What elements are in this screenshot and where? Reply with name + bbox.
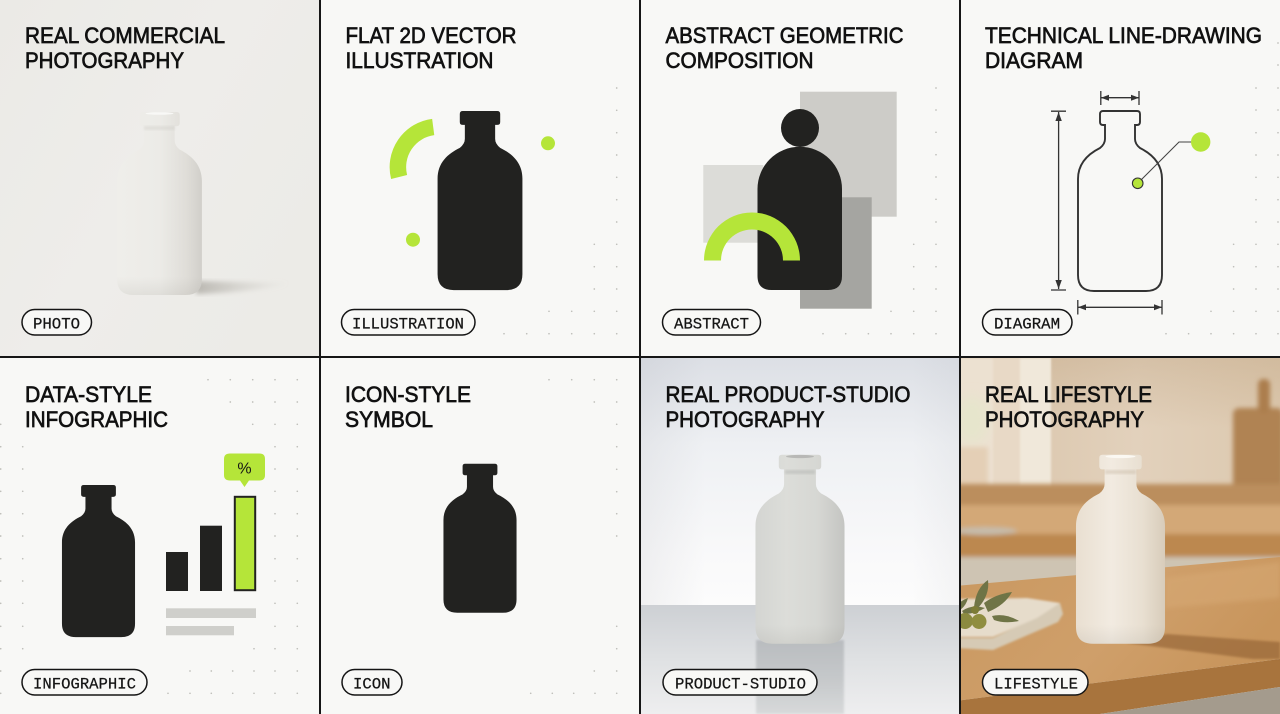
bottle cast shadow [196,281,290,294]
green arc [398,127,433,177]
floor at bottom right [1100,687,1280,714]
tag: lifestyle [982,670,1088,695]
pale grey square [703,165,763,243]
bottle outline [1078,111,1162,291]
bar chart [166,497,255,591]
photo of white bottle [117,112,202,295]
heading: ABSTRACT GEOMETRIC [666,23,904,48]
panel: icon-style symbol [342,380,617,695]
blurred pot [961,446,989,485]
panel: real lifestyle photography [950,358,1280,714]
heading: FLAT 2D VECTOR [346,23,516,48]
caption placeholder bars [166,608,256,635]
heading: DATA-STYLE [25,382,152,407]
tag: icon [342,670,402,695]
dimension: neck width [1101,91,1139,105]
table front edge [955,659,1280,714]
sun band on table [1190,564,1279,602]
tag: infographic: INFOGRAPHIC [33,675,136,693]
heading: SYMBOL [345,407,433,432]
panel: real commercial photography [0,0,319,356]
panel: abstract geometric composition [662,23,936,335]
heading: PHOTOGRAPHY [985,407,1144,432]
panel: data-style infographic [1,380,297,695]
window light [955,358,1051,492]
tag: abstract [662,310,760,335]
tag: infographic [22,670,147,695]
blurred cutting boards [1233,379,1280,500]
percent callout: % [237,460,252,478]
bottle cast shadow [1127,634,1280,659]
heading: ILLUSTRATION [346,48,494,73]
dimension: base width [1078,300,1162,314]
mid grey square [800,197,872,309]
tag: diagram: DIAGRAM [994,315,1060,333]
percent callout [224,454,265,487]
heading: PHOTOGRAPHY [666,407,825,432]
olive branch [955,580,1019,629]
tag: icon: ICON [353,675,390,693]
green dot right [541,136,555,150]
callout leader and markers [1132,132,1210,189]
black bottle silhouette [438,111,522,290]
kitchen wall [961,358,1280,488]
photo of grey bottle [755,455,845,644]
light grey square [800,92,897,217]
black circle [781,109,819,147]
blurred plant and pot [956,396,988,444]
tag: diagram [982,310,1072,335]
folded napkin [955,598,1063,650]
tag: abstract: ABSTRACT [674,315,749,333]
heading: TECHNICAL LINE-DRAWING [985,23,1262,48]
tag: photo: PHOTO [33,315,80,333]
heading: INFOGRAPHIC [25,407,168,432]
backdrop edge falloff [641,364,660,605]
green arch [704,212,800,260]
tag: lifestyle: LIFESTYLE [994,675,1078,693]
bottle reflection [756,640,844,714]
heading: REAL COMMERCIAL [25,23,225,48]
green dot left [406,233,420,247]
tag: product-studio: PRODUCT-STUDIO [675,675,806,693]
panel: real product-studio photography [641,358,960,714]
tag: illustration [342,310,475,335]
back counter [961,480,1280,586]
panel: technical line-drawing diagram [982,23,1278,335]
tag: photo [22,310,92,335]
wall top shading [1051,358,1280,400]
heading: PHOTOGRAPHY [25,48,184,73]
heading: REAL LIFESTYLE [985,382,1152,407]
heading: ICON-STYLE [345,382,471,407]
photo backdrop [0,0,319,356]
heading: COMPOSITION [666,48,814,73]
tag: product-studio [663,670,817,695]
tag: illustration: ILLUSTRATION [352,315,464,333]
photo of cream bottle [1076,455,1165,644]
studio backdrop [641,358,959,464]
wooden table top [955,557,1280,701]
heading: DIAGRAM [985,48,1083,73]
dimension: height [1051,111,1066,290]
black bottle silhouette [62,485,135,637]
heading: REAL PRODUCT-STUDIO [666,382,910,407]
black dome body [758,147,842,290]
studio table surface [641,605,960,714]
panel: flat 2D vector illustration [342,23,617,335]
black bottle icon [443,464,517,613]
